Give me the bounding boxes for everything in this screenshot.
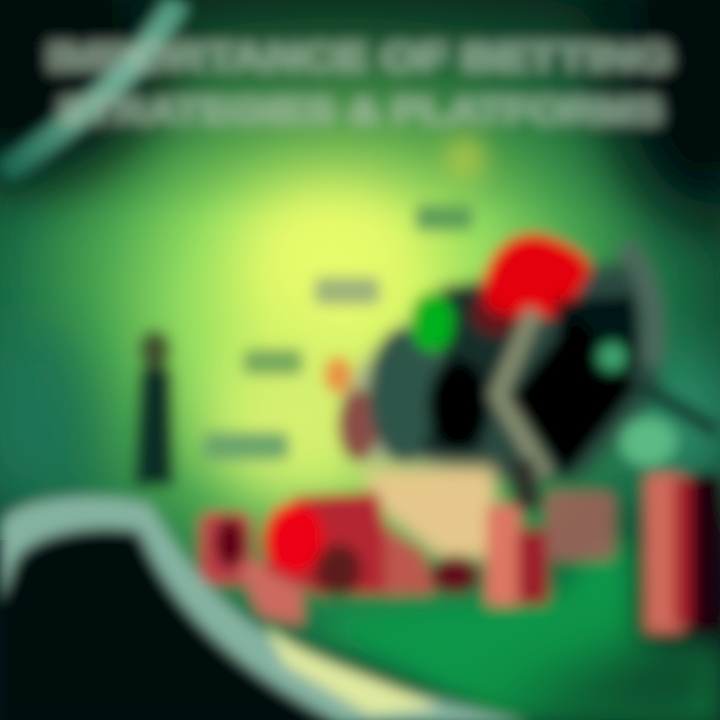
large machine figure	[324, 233, 718, 510]
machine: dark backing	[420, 260, 660, 480]
machine: black core	[428, 359, 488, 451]
machine: teal drum	[369, 327, 441, 463]
red chip stacks	[200, 474, 720, 632]
standing figure	[134, 330, 174, 486]
machine: dark upper body	[420, 280, 530, 455]
small yellow glow	[447, 136, 483, 180]
label: bottom: Label	[228, 440, 262, 455]
machine: green circle	[598, 343, 626, 371]
stack: rear chips	[546, 492, 614, 560]
machine: dark navy shoulder	[555, 295, 640, 380]
label: middle	[314, 277, 380, 305]
title	[48, 37, 672, 131]
stack: red chips	[262, 492, 398, 595]
stack: middle chips	[385, 527, 435, 595]
green table	[310, 540, 720, 720]
machine: reddish wedge	[338, 389, 378, 461]
machine: grey chevron	[498, 310, 545, 475]
label: lower	[243, 349, 303, 375]
title: IMPORTANCE OF BETTING	[48, 37, 672, 79]
machine: red knob	[482, 233, 590, 318]
label: bottom	[203, 432, 289, 460]
label: middle: Label	[330, 284, 364, 299]
machine: dark red base of knob	[471, 288, 523, 336]
foreground dark hill	[0, 497, 530, 720]
label: lower: Label	[255, 355, 289, 370]
machine: black diamond	[510, 315, 638, 478]
decorative swoosh top left	[4, 0, 178, 172]
stack: tall chips	[486, 505, 520, 605]
stack: lower left chips	[238, 558, 302, 625]
pale cream band behind stacks	[360, 465, 500, 560]
machine: orange spot	[324, 356, 352, 394]
label: top	[415, 205, 473, 231]
machine: arm	[625, 245, 653, 365]
machine: lower leg	[520, 460, 530, 510]
machine: pale halo	[345, 300, 470, 470]
machine: light green patch	[620, 418, 676, 466]
machine: green highlight	[410, 292, 454, 352]
label: top: Label	[427, 211, 461, 226]
stack: left chips	[200, 512, 252, 584]
stack: right column	[646, 474, 684, 632]
title: STRATEGIES & PLATFORMS	[58, 90, 662, 131]
